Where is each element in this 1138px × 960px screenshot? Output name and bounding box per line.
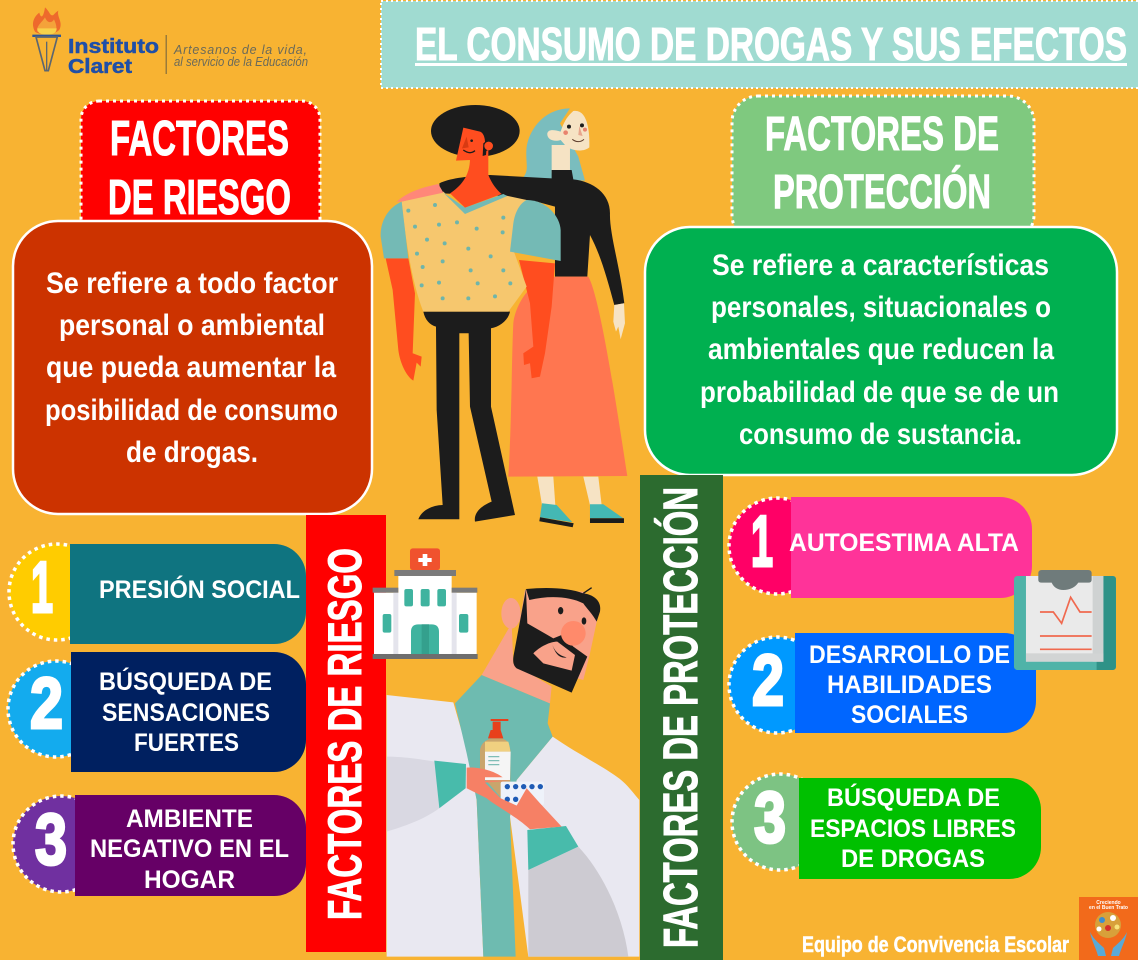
- logo tagline: Artesanos de la vida,: [173, 43, 307, 57]
- logo: Instituto Claret: [32, 7, 308, 78]
- vertical banner: factores de riesgo: [306, 515, 386, 952]
- text: definition risk: Se refiere a todo factor: [46, 267, 338, 300]
- footer credit: Equipo de Convivencia Escolar: [802, 932, 1069, 957]
- risk item 3: AMBIENTE: [126, 805, 253, 833]
- text: definition risk: posibilidad de consumo: [45, 394, 338, 427]
- heading: factores de protección: [732, 96, 1034, 241]
- protection item 2: SOCIALES: [851, 701, 968, 729]
- risk item 1: [9, 544, 306, 644]
- risk item 3: HOGAR: [144, 866, 235, 894]
- badge: creciendo en el buen trato: Creciendo: [1096, 900, 1121, 906]
- text: definition risk: que pueda aumentar la: [46, 351, 336, 384]
- protection item 1: 1: [751, 502, 773, 582]
- text: definition protection: [700, 249, 1059, 451]
- protection item 2: [729, 633, 1036, 733]
- text: definition protection: ambientales que reducen la: [708, 333, 1054, 366]
- risk item 2: 2: [30, 664, 63, 744]
- icon: torch: [32, 7, 61, 71]
- risk item 2: [8, 652, 306, 772]
- vertical banner: factores de protección: FACTORES DE PROTECCIÓN: [653, 487, 708, 948]
- protection item 3: 3: [754, 778, 786, 858]
- logo name: Instituto: [68, 36, 159, 58]
- icon: clipboard: [1014, 570, 1116, 670]
- risk item 3: NEGATIVO EN EL: [90, 835, 289, 863]
- panel: definición factores de riesgo: [13, 221, 372, 514]
- heading: factores de riesgo: [81, 101, 320, 236]
- icon: hospital: [373, 548, 478, 659]
- badge: creciendo en el buen trato: en el Buen Trato: [1089, 905, 1128, 911]
- text: definition protection: personales, situacionales o: [711, 291, 1051, 324]
- heading: factores de riesgo: DE RIESGO: [108, 171, 291, 225]
- protection item 3: [732, 774, 1041, 879]
- risk item 3: 3: [35, 800, 67, 880]
- illustration: couple: [381, 105, 627, 527]
- protection item 1: AUTOESTIMA ALTA: [789, 529, 1019, 557]
- panel: definición factores de protección: [645, 227, 1117, 475]
- badge: creciendo en el buen trato: [1079, 897, 1138, 960]
- risk item 2: BÚSQUEDA DE: [99, 666, 272, 696]
- logo tagline: [173, 43, 308, 69]
- protection item 2: HABILIDADES: [827, 671, 992, 699]
- risk item 1: 1: [31, 548, 53, 628]
- text: definition risk: personal o ambiental: [59, 309, 325, 342]
- logo name: [68, 36, 159, 78]
- text: definition protection: consumo de sustancia.: [739, 418, 1022, 451]
- heading: factores de protección: FACTORES DE: [765, 108, 999, 161]
- text: definition risk: de drogas.: [126, 436, 258, 469]
- text: definition protection: probabilidad de que se de un: [700, 376, 1059, 409]
- risk item 1: PRESIÓN SOCIAL: [99, 574, 300, 604]
- icon: pill blister: [501, 782, 544, 805]
- heading: factores de riesgo: FACTORES: [110, 112, 289, 166]
- heading: factores de protección: PROTECCIÓN: [773, 164, 991, 219]
- text: definition protection: Se refiere a características: [712, 249, 1049, 282]
- vertical banner: factores de protección: [640, 475, 723, 960]
- logo name: Claret: [68, 56, 132, 78]
- protection item 2: 2: [752, 641, 784, 721]
- text: definition risk: [45, 267, 338, 469]
- vertical banner: factores de riesgo: FACTORES DE RIESGO: [318, 548, 371, 920]
- risk item 2: SENSACIONES: [102, 699, 270, 727]
- protection item 3: ESPACIOS LIBRES: [810, 815, 1016, 843]
- logo tagline: al servicio de la Educación: [174, 55, 308, 69]
- protection item 1: [729, 497, 1032, 598]
- protection item 3: BÚSQUEDA DE: [827, 782, 1000, 812]
- title banner: [381, 1, 1138, 88]
- risk item 3: [13, 795, 306, 896]
- protection item 3: DE DROGAS: [841, 845, 985, 873]
- illustration: doctor: [387, 588, 639, 957]
- risk item 2: FUERTES: [134, 729, 239, 757]
- icon: soap bottle: [480, 720, 511, 797]
- protection item 2: DESARROLLO DE: [809, 641, 1010, 669]
